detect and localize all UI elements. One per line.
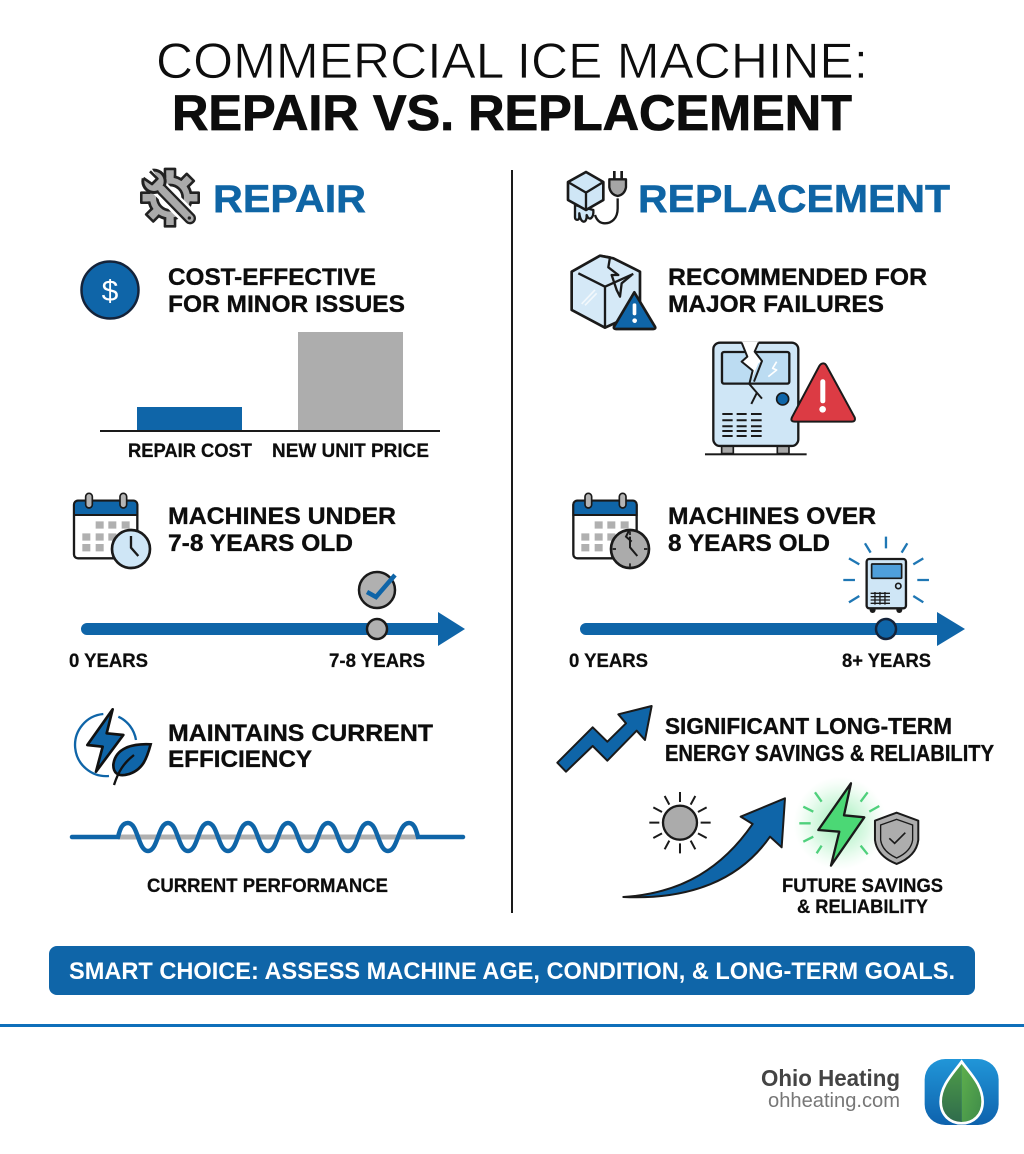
arrow: rising curve — [623, 798, 785, 897]
text: machines under: 7-8 YEARS OLD — [168, 530, 353, 557]
text: machines over: 8 YEARS OLD — [668, 530, 830, 557]
icon: dollar — [82, 262, 138, 318]
text: long-term savings: SIGNIFICANT LONG-TERM — [665, 713, 952, 739]
icon: cracked ice with warning — [572, 256, 655, 329]
timeline: repair age: 0 YEARS — [69, 651, 148, 672]
heading: repair: REPAIR — [213, 178, 366, 221]
icon: sun — [649, 792, 711, 853]
text: future savings: FUTURE SAVINGS — [782, 876, 943, 897]
text: cost-effective: FOR MINOR ISSUES — [168, 291, 405, 318]
illustration: broken ice machine with warning — [705, 342, 855, 455]
banner: smart choice: SMART CHOICE: ASSESS MACHINE AGE, CONDITION, & LONG-TERM GOALS. — [69, 958, 955, 985]
timeline: repair age: 7-8 YEARS — [329, 651, 425, 672]
text: recommended: RECOMMENDED FOR — [668, 264, 927, 291]
icon: zig-zag growth arrow — [557, 706, 652, 772]
text: cost-effective: COST-EFFECTIVE — [168, 264, 376, 291]
text: maintains efficiency — [168, 720, 433, 773]
bar chart: repair vs new unit: NEW UNIT PRICE — [272, 441, 429, 462]
text: machines under: MACHINES UNDER — [168, 503, 396, 530]
text: machines over — [668, 503, 876, 557]
footer brand text — [761, 1065, 900, 1112]
text: future savings: & RELIABILITY — [797, 897, 928, 918]
icon: calendar with clock — [74, 493, 150, 568]
text: machines over: MACHINES OVER — [668, 503, 876, 530]
icon: green energy bolt — [793, 777, 887, 870]
icon: shield — [875, 813, 918, 864]
banner: smart choice — [49, 946, 975, 995]
title — [156, 33, 868, 141]
icon: ice cube with plug — [568, 171, 626, 223]
panel: replacement — [557, 171, 994, 918]
icon: calendar with cracked clock — [573, 493, 649, 568]
footer brand text: Ohio Heating — [761, 1065, 900, 1091]
chart: current performance wave: CURRENT PERFORMANCE — [147, 876, 388, 897]
title: REPAIR VS. REPLACEMENT — [172, 85, 852, 141]
bar chart: repair vs new unit: REPAIR COST — [128, 441, 252, 462]
text: future savings — [782, 876, 943, 918]
title: COMMERCIAL ICE MACHINE: — [156, 33, 868, 89]
icon: bolt and leaf — [75, 709, 151, 785]
panel: repair — [69, 167, 465, 897]
footer brand text: ohheating.com — [768, 1089, 900, 1112]
text: recommended: MAJOR FAILURES — [668, 291, 884, 318]
text: recommended — [668, 264, 927, 318]
timeline: replacement age: 0 YEARS — [569, 651, 648, 672]
center divider — [511, 170, 513, 913]
timeline: repair age — [69, 572, 465, 672]
text: long-term savings — [665, 713, 994, 766]
text: machines under — [168, 503, 396, 557]
logo: leaf app icon — [925, 1059, 999, 1125]
timeline: replacement age — [569, 612, 965, 672]
timeline: replacement age: 8+ YEARS — [842, 651, 931, 672]
text: maintains efficiency: MAINTAINS CURRENT — [168, 720, 433, 747]
chart: current performance wave — [72, 823, 463, 897]
icon: dollar: $ — [102, 275, 119, 308]
icon: wrench and gear — [139, 167, 200, 228]
bar chart: repair vs new unit — [100, 332, 440, 462]
text: maintains efficiency: EFFICIENCY — [168, 746, 312, 773]
text: cost-effective — [168, 264, 405, 318]
heading: replacement: REPLACEMENT — [638, 178, 950, 221]
footer rule — [0, 1024, 1024, 1027]
icon: new ice machine with rays — [843, 537, 929, 613]
